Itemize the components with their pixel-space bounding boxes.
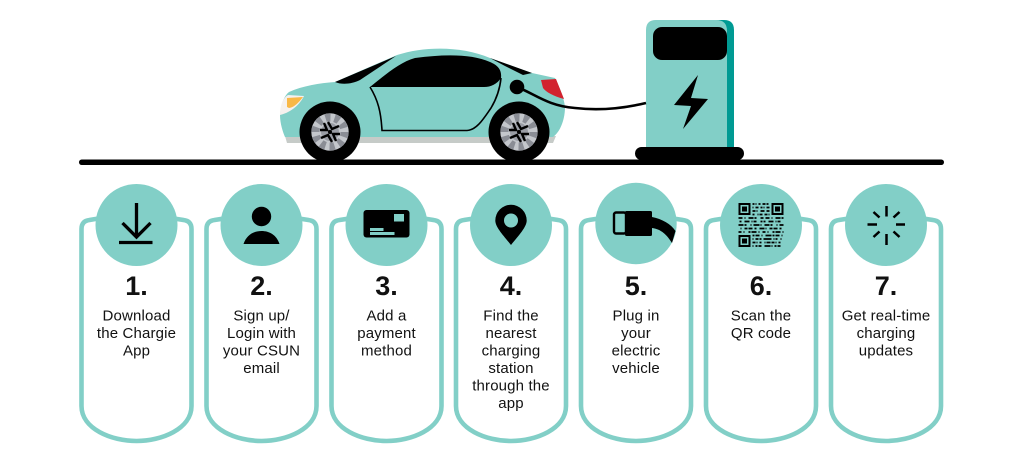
- step 3: [332, 184, 442, 441]
- step text: Plug in: [613, 308, 659, 324]
- icon: payment card: [364, 210, 410, 238]
- step text: charging: [482, 342, 540, 360]
- step text: charging: [857, 325, 915, 342]
- step text: the Chargie: [97, 325, 176, 342]
- step text: Get real-time: [842, 308, 930, 324]
- icon: lightning bolt: [674, 75, 708, 129]
- charging cable: [517, 87, 646, 109]
- step number: 4.: [500, 271, 522, 301]
- headlight: [280, 95, 304, 115]
- step 7: [831, 184, 941, 441]
- station base: [635, 147, 744, 160]
- step 4: [456, 184, 566, 441]
- icon circle: [720, 184, 802, 266]
- icon: QR code: [738, 203, 784, 247]
- icon circle: [220, 184, 302, 266]
- step text: Add a: [367, 308, 407, 324]
- step 1: [82, 184, 192, 441]
- charging port: [510, 80, 524, 94]
- headlight lamp: [287, 97, 303, 108]
- step text: method: [361, 342, 412, 360]
- card outline: [581, 216, 691, 441]
- step text: Download: [103, 308, 170, 324]
- step text: Login with: [227, 325, 296, 342]
- step text: your CSUN: [223, 342, 300, 360]
- station body: [646, 20, 727, 148]
- icon circle: [845, 184, 927, 266]
- rear wheel: [488, 102, 550, 162]
- step text: through the: [472, 378, 550, 394]
- step 6: [706, 184, 816, 441]
- icon: map pin: [495, 205, 527, 245]
- card outline: [82, 216, 192, 441]
- car body: [280, 49, 565, 137]
- station body shadow side: [715, 20, 734, 148]
- step number: 7.: [875, 271, 897, 301]
- icon: download: [119, 203, 152, 242]
- icon: plug: [614, 211, 676, 243]
- step text: vehicle: [612, 360, 660, 377]
- icon circle: [96, 184, 178, 266]
- windshield strip: [335, 56, 396, 84]
- step text: electric: [612, 342, 661, 360]
- step text: your: [621, 325, 651, 342]
- step number: 1.: [125, 271, 148, 301]
- step text: Sign up/: [233, 308, 290, 324]
- step 2: [206, 184, 316, 441]
- illustration: charging station: [510, 20, 744, 160]
- illustration: electric car: [280, 49, 565, 162]
- step text: Scan the: [731, 308, 791, 324]
- door outline: [370, 78, 501, 130]
- tail light: [541, 79, 564, 99]
- station screen: [653, 27, 727, 60]
- step number: 6.: [750, 271, 772, 301]
- step text: Find the: [483, 308, 539, 324]
- step text: updates: [859, 342, 913, 360]
- rear window strip: [490, 58, 532, 75]
- car underbody shadow: [285, 136, 556, 143]
- step text: App: [123, 342, 150, 360]
- icon circle: [595, 183, 677, 264]
- front wheel: [300, 102, 360, 162]
- step text: email: [243, 360, 280, 377]
- step 5: [581, 183, 691, 441]
- step text: app: [498, 395, 524, 412]
- road line: [79, 160, 944, 165]
- icon: person: [244, 207, 280, 244]
- card outline: [332, 216, 442, 441]
- step text: nearest: [485, 325, 537, 342]
- card outline: [706, 216, 816, 441]
- step text: QR code: [731, 325, 791, 342]
- card outline: [831, 216, 941, 441]
- step text: station: [488, 360, 534, 377]
- icon: loading spinner: [868, 206, 905, 245]
- icon circle: [470, 184, 552, 266]
- step number: 3.: [375, 271, 398, 301]
- step number: 5.: [625, 271, 647, 301]
- step number: 2.: [250, 271, 273, 301]
- card outline: [206, 216, 316, 441]
- icon circle: [346, 184, 428, 266]
- side window: [370, 55, 501, 87]
- step text: payment: [357, 325, 416, 342]
- card outline: [456, 216, 566, 441]
